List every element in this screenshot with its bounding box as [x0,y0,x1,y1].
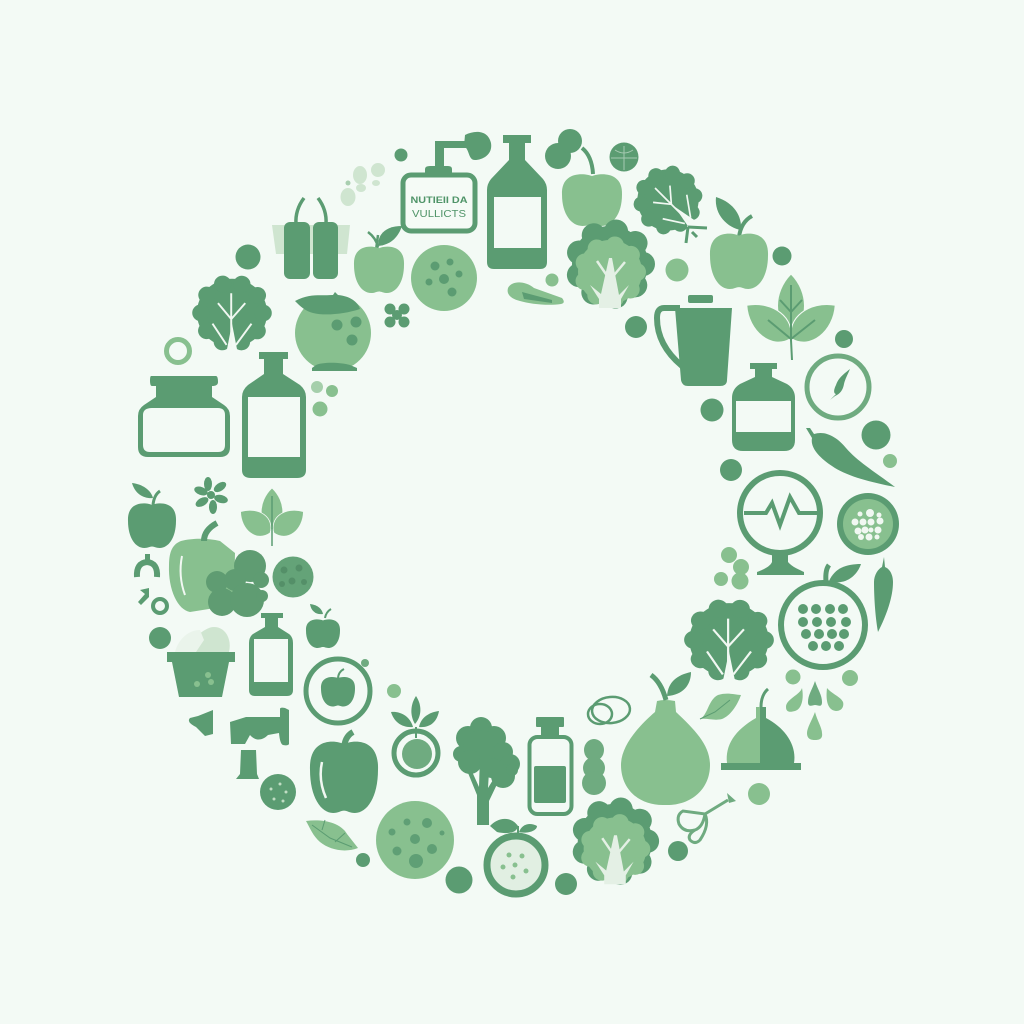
icon: large dark apple [310,732,378,813]
dot [835,330,853,348]
icon: bottle left [242,352,306,478]
dot [862,420,890,450]
icon: compass [807,356,869,418]
icon: small fruit bottom [446,866,472,894]
icon: horseshoe tool [137,562,157,577]
icon: lettuce left [197,279,267,356]
icon: large apple with spots [295,292,371,371]
icon: three leaves [738,274,844,360]
icon: disk with seeds [837,493,899,555]
dot [625,316,647,338]
icon: small arrow [138,588,149,605]
icon: small fruit [610,142,638,172]
icon: jar left [138,376,230,457]
icon: broccoli top [572,226,648,308]
icon: leaf [700,694,741,720]
icon: light apple [710,234,768,289]
icon: large light cookie [376,801,454,879]
icon: cherry and light apple [545,129,622,226]
label text second line: VULLICTS [412,209,466,220]
dot [720,459,742,481]
icon: light apple with leaf [354,226,404,293]
icons: droplets [786,670,858,740]
icon: sprout ring apple [391,696,439,775]
icon: jar right [732,363,795,451]
icon: lettuce top right [625,157,717,249]
icon: leaf [716,197,752,237]
icon: clover [384,304,410,328]
dot [236,244,260,270]
icons: three dots [311,381,338,416]
icon: heart monitor [740,473,820,575]
dot [546,274,558,286]
icon: post [145,554,150,562]
dot [555,873,577,895]
icon: light round cookie [411,245,477,311]
icon: nutrition label dispenser [403,132,491,231]
icon: chili [806,428,895,487]
icons: small pale dots top left [340,163,385,206]
dot [666,258,688,282]
icon: bell [189,710,213,736]
icon: dark apple left [128,483,176,548]
label text: NUTIEII DA [410,195,468,206]
icon: small ring [153,599,167,613]
icon: ring [166,340,190,362]
icon: gadget [230,708,289,745]
dot [883,454,897,468]
dot [394,148,408,162]
icon: spoon [508,282,564,305]
icon: small pepper [874,557,893,632]
icon: small stand [236,750,259,779]
icon: broccoli bottom [578,804,652,884]
icon: large pear [621,672,710,805]
icon: small cookie [260,774,296,810]
dot [668,841,688,861]
icon: bucket [167,627,235,697]
icon: flower [193,477,229,514]
icon: bottle top [487,135,547,269]
icon: chain of beads [582,739,606,795]
dot [387,684,401,698]
icon: apple in ring [306,659,370,723]
dot [700,398,724,422]
icon: interlinked rings [588,695,631,725]
icon: pomegranate [781,564,865,667]
icon: twin peppers [272,198,350,279]
icon: leaf bottom left [306,820,358,850]
dot [772,246,792,266]
icon: small apple [306,604,340,648]
icons: four light dots [714,547,749,590]
icon: three leaves left [234,488,310,546]
icon: tree [453,717,520,825]
icon: round dotted disc [272,556,314,598]
dot [748,783,770,805]
icon: outlined bottle [530,717,572,814]
panel: ring of nutrition icons [128,129,899,895]
icon: small bottle [249,613,293,696]
icon: big light apple with berries [169,523,269,617]
icon: half shaded pear on base [721,689,801,770]
icon: scissors [678,793,736,842]
icon: pitcher [657,295,732,386]
icon: lettuce right [689,603,769,686]
dot [149,627,171,649]
icon: ring fruit with leaves [487,819,545,894]
dot [356,853,370,867]
